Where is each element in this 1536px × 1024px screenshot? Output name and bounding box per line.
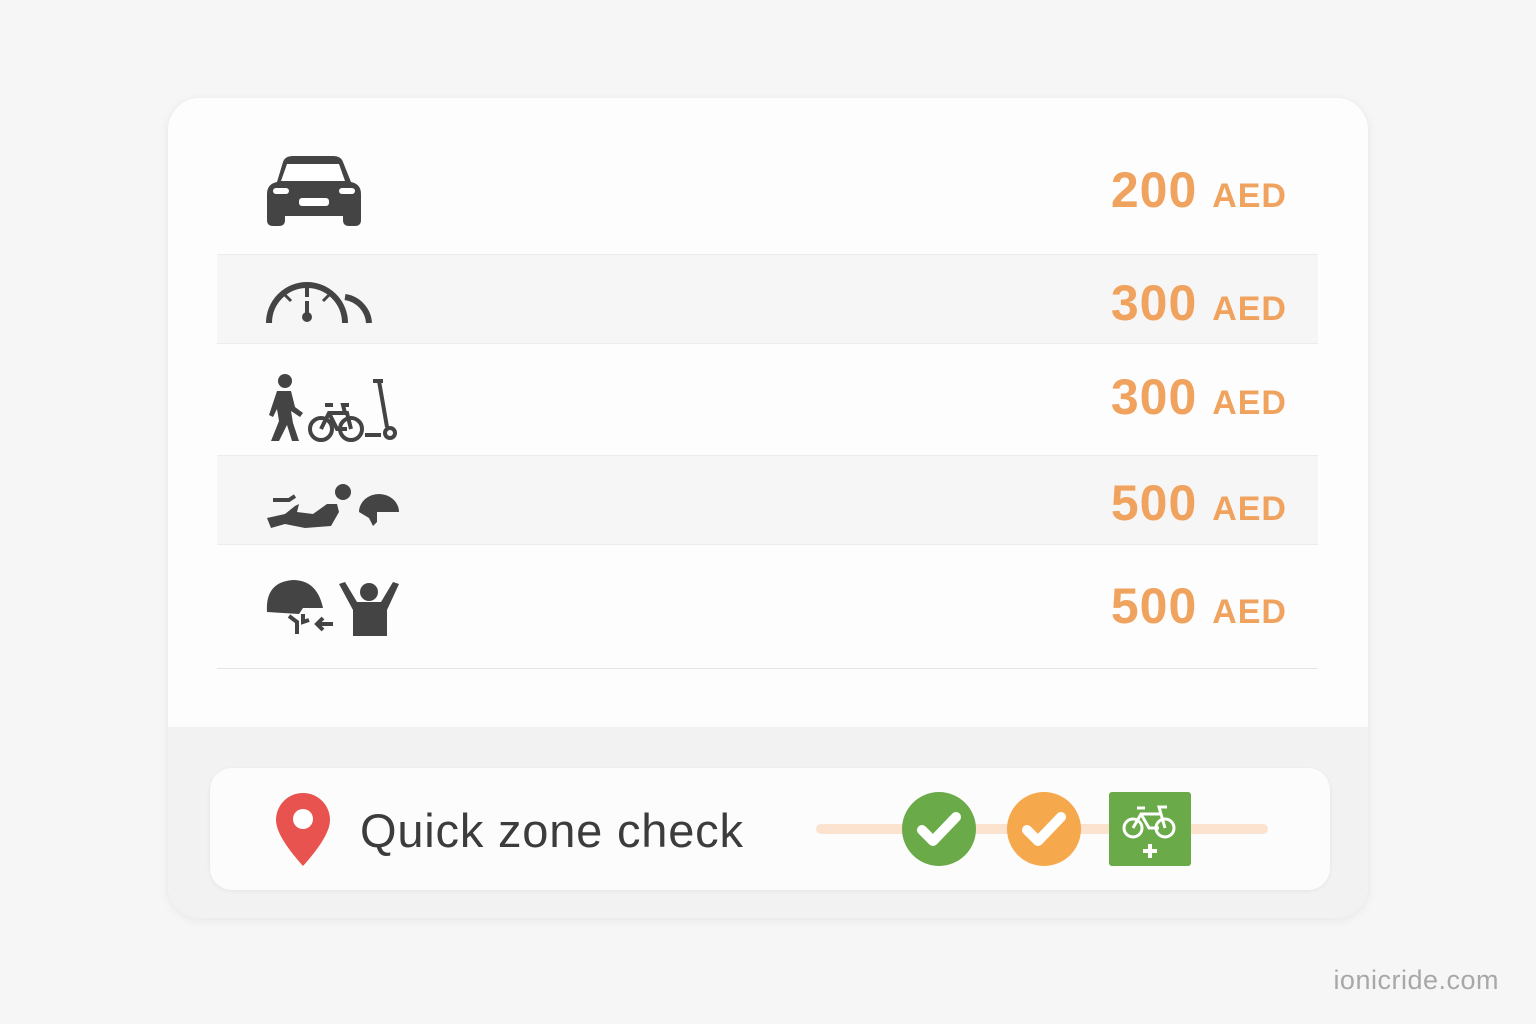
panel: fines card bbox=[168, 98, 1368, 918]
icon: fallen rider helmet bbox=[267, 484, 399, 528]
price: 300 AED bbox=[1111, 369, 1287, 425]
icon: helmet and person bbox=[266, 580, 399, 636]
row: crash helmet 500 AED bbox=[217, 455, 1318, 545]
row: no helmet 500 AED bbox=[266, 578, 1287, 636]
icon: car bbox=[267, 156, 361, 226]
heading: Quick zone check bbox=[360, 804, 744, 857]
price: 300 AED bbox=[1111, 275, 1287, 331]
row: car 200 AED bbox=[267, 156, 1287, 226]
icon: bike lane sign bbox=[1109, 792, 1191, 866]
icon: location pin bbox=[276, 793, 330, 866]
price: 500 AED bbox=[1111, 578, 1287, 634]
row: pedestrian/bike 300 AED bbox=[269, 369, 1287, 442]
icon: pedestrian bike scooter bbox=[269, 374, 397, 442]
price: 200 AED bbox=[1111, 162, 1287, 218]
price: 500 AED bbox=[1111, 475, 1287, 531]
icon: green check bbox=[902, 792, 976, 866]
footer: source: ionicride.com bbox=[1333, 965, 1499, 995]
row: speed 300 AED bbox=[217, 254, 1318, 344]
track line bbox=[816, 824, 1268, 834]
icon: speedometer bbox=[266, 282, 372, 324]
icon: orange check bbox=[1007, 792, 1081, 866]
panel: quick zone check bbox=[210, 768, 1330, 890]
